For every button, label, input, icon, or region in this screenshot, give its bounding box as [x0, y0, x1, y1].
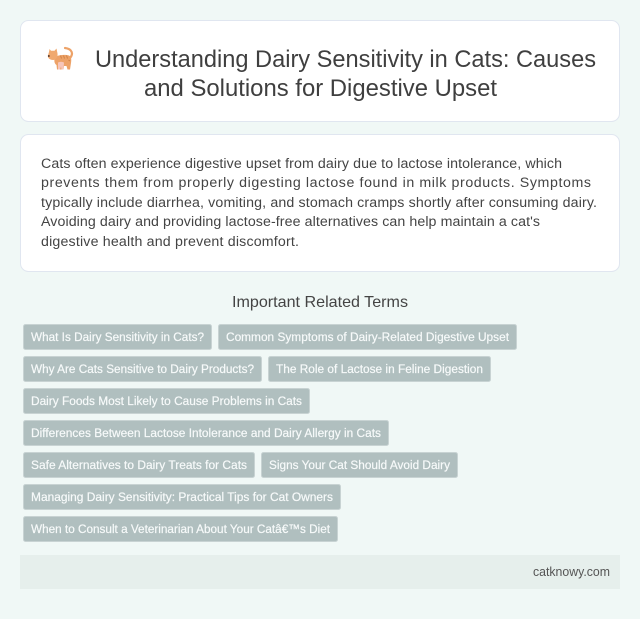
tag — [24, 324, 212, 350]
description text: digestive health and prevent discomfort. — [41, 234, 299, 250]
description text — [41, 156, 597, 250]
tag — [24, 452, 254, 478]
tag: Common Symptoms of Dairy-Related Digestive Upset — [226, 330, 510, 344]
tag: The Role of Lactose in Feline Digestion — [276, 362, 483, 376]
tag — [262, 452, 458, 478]
heading: related terms: Important Related Terms — [232, 294, 408, 311]
description text: Avoiding dairy and providing lactose-free alternatives can help maintain a cat's — [41, 214, 540, 230]
tag: What Is Dairy Sensitivity in Cats? — [31, 330, 204, 344]
panel: description card — [20, 134, 620, 272]
icon: cat — [48, 48, 72, 70]
tag: Managing Dairy Sensitivity: Practical Tips for Cat Owners — [31, 490, 333, 504]
tag — [268, 356, 490, 382]
tags: related terms — [24, 324, 516, 542]
tag — [24, 516, 338, 542]
tag: Safe Alternatives to Dairy Treats for Cats — [31, 458, 247, 472]
title: and Solutions for Digestive Upset — [144, 75, 497, 102]
footer — [20, 555, 620, 589]
description text: Cats often experience digestive upset from dairy due to lactose intolerance, which — [41, 156, 562, 172]
description text: typically include diarrhea, vomiting, and stomach cramps shortly after consuming dairy. — [41, 195, 597, 211]
tag: When to Consult a Veterinarian About Your Catâ€™s Diet — [31, 522, 331, 536]
tag: Signs Your Cat Should Avoid Dairy — [269, 458, 451, 472]
description text: prevents them from properly digesting lactose found in milk products. Symptoms — [41, 175, 591, 191]
title: Understanding Dairy Sensitivity in Cats: Causes — [95, 46, 596, 73]
tag — [218, 324, 516, 350]
tag: Differences Between Lactose Intolerance and Dairy Allergy in Cats — [31, 426, 381, 440]
tag — [24, 420, 388, 446]
tag — [24, 356, 262, 382]
footer: catknowy.com — [533, 565, 610, 579]
title — [95, 46, 596, 102]
panel: title card — [20, 20, 620, 122]
tag — [24, 388, 310, 414]
tag: Dairy Foods Most Likely to Cause Problems in Cats — [31, 394, 302, 408]
tag — [24, 484, 340, 510]
tag: Why Are Cats Sensitive to Dairy Products? — [31, 362, 254, 376]
